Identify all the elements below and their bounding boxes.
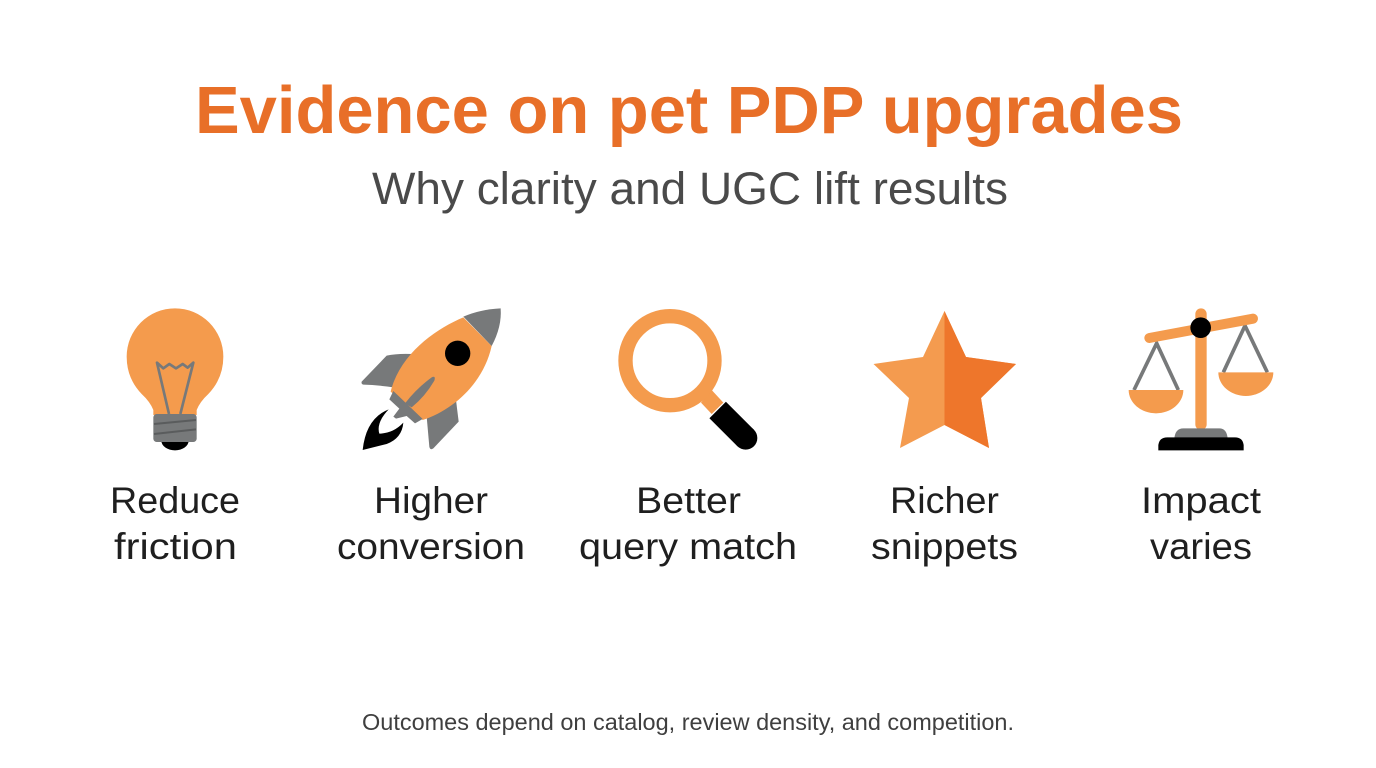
label: Better query match [579,480,797,567]
label: Richer snippets [871,480,1018,567]
icon: light bulb [127,308,223,450]
icon: balance scale [1129,308,1273,450]
label: Reduce friction: Reduce [110,480,240,521]
item: reduce friction [110,308,240,567]
item: impact varies [1129,308,1273,567]
item: richer snippets [871,311,1018,567]
label: Better query match: Better [636,480,741,521]
subtitle: Why clarity and UGC lift results [372,163,1008,214]
label: Higher conversion [337,480,525,567]
icon: star [874,311,1016,448]
label: Impact varies [1141,480,1262,567]
label: Impact varies: varies [1150,526,1252,567]
footnote: Outcomes depend on catalog, review density, and competition. [362,709,1014,735]
label: Richer snippets: snippets [871,526,1018,567]
label: Richer snippets: Richer [890,480,999,521]
label: Reduce friction [110,480,240,567]
label: Higher conversion: conversion [337,526,525,567]
label: Impact varies: Impact [1141,480,1262,521]
icon: rocket [362,308,501,450]
item: better query match [579,316,797,567]
title: Evidence on pet PDP upgrades [195,73,1183,148]
item: higher conversion [337,308,525,567]
label: Higher conversion: Higher [374,480,488,521]
icon: magnifying glass [625,316,757,450]
label: Better query match: query match [579,526,797,567]
label: Reduce friction: friction [114,526,237,567]
